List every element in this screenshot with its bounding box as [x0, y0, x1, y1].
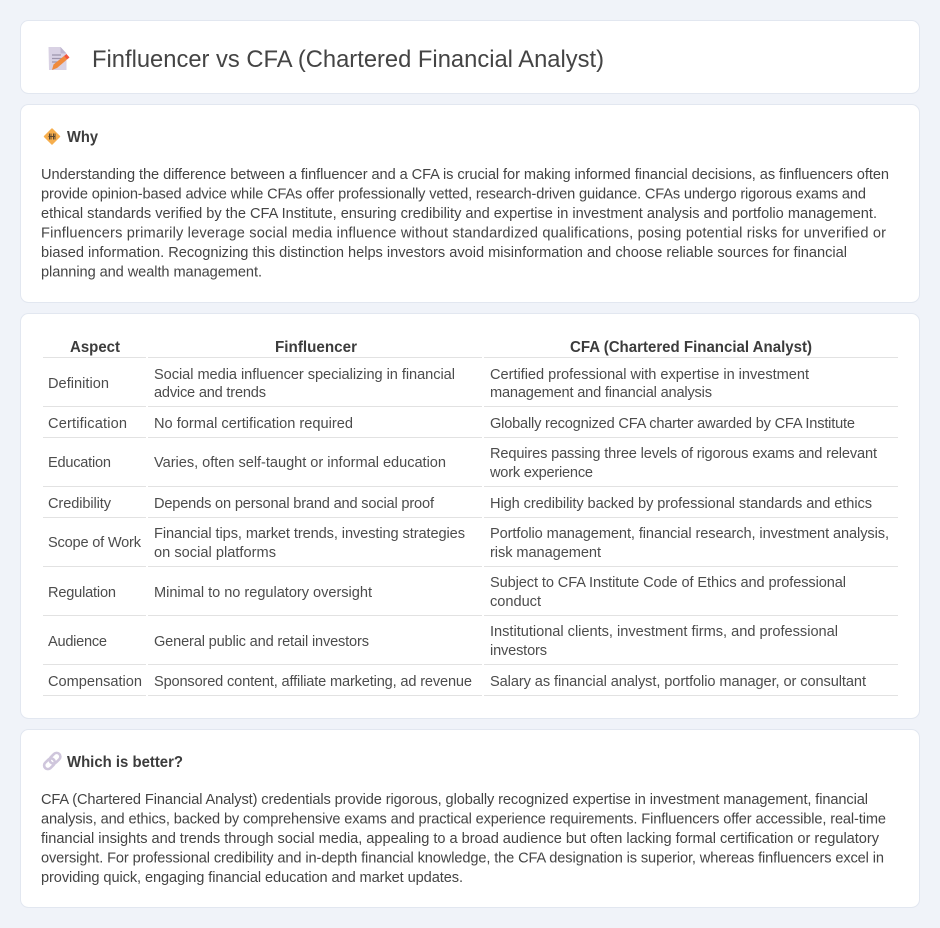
text block: why paragraph: Understanding the difference between a finfluencer and a CFA is crucial for making informed financial decisions, as finfluencers often — [41, 167, 889, 183]
icon: orange diamond sign — [44, 129, 60, 144]
row: certification — [43, 416, 898, 438]
row: compensation: Sponsored content, affiliate marketing, ad revenue — [154, 674, 472, 690]
row: audience: General public and retail investors — [154, 634, 369, 650]
row: regulation: conduct — [490, 594, 541, 610]
row: education: Requires passing three levels of rigorous exams and relevant — [490, 446, 877, 462]
row: regulation: Minimal to no regulatory oversight — [154, 585, 372, 601]
row: definition: management and financial analysis — [490, 385, 712, 401]
icon: link — [43, 751, 62, 771]
row: definition: advice and trends — [154, 385, 266, 401]
row: compensation: Salary as financial analyst, portfolio manager, or consultant — [490, 674, 866, 690]
panel: title card — [20, 20, 920, 94]
row: scope of work: risk management — [490, 545, 601, 561]
row: definition: Social media influencer specializing in financial — [154, 367, 455, 383]
heading: why: Why — [67, 129, 98, 146]
row: scope of work: on social platforms — [154, 545, 276, 561]
row: definition — [43, 367, 898, 406]
row: scope of work: Financial tips, market trends, investing strategies — [154, 526, 465, 542]
text block: why paragraph: ethical standards verified by the CFA Institute, ensuring credibility and expertise in investment analysis and portfolio management. — [41, 206, 877, 222]
row: audience — [43, 624, 898, 664]
row: credibility — [43, 496, 898, 518]
row: education: Education — [48, 455, 111, 471]
row: education: work experience — [489, 465, 593, 481]
table header — [43, 339, 898, 358]
row: certification: No formal certification required — [154, 416, 353, 432]
row: audience: investors — [490, 643, 547, 659]
text block: which is better paragraph: financial insights and trends through social media, appealing to a broad audience but often lacking formal certification or regulatory — [41, 831, 880, 847]
row: compensation: Compensation — [48, 674, 142, 690]
row: definition: Definition — [48, 376, 109, 392]
row: regulation: Subject to CFA Institute Code of Ethics and professional — [490, 575, 846, 591]
text block: which is better paragraph: analysis, and ethics, backed by comprehensive exams and practical experience requirements. Finfluencers offer accessible, real-time — [41, 812, 886, 828]
row: regulation: Regulation — [48, 585, 116, 601]
icon: memo with pencil — [48, 47, 70, 70]
text block: why paragraph: provide opinion-based advice while CFAs offer professionally vetted, research-driven guidance. CFAs undergo rigorous exams and — [41, 186, 866, 202]
row: audience: Audience — [48, 634, 107, 650]
table header: Aspect — [70, 339, 121, 356]
heading: which is better: Which is better? — [67, 754, 183, 771]
row: scope of work: Portfolio management, financial research, investment analysis, — [490, 526, 889, 542]
row: scope of work — [43, 526, 898, 566]
text block: why paragraph — [41, 167, 889, 280]
text block: why paragraph: Finfluencers primarily leverage social media influence without standardized qualifications, posing potential risks for unverified or — [41, 226, 886, 242]
row: credibility: High credibility backed by professional standards and ethics — [490, 496, 872, 512]
row: education — [43, 446, 898, 486]
text block: which is better paragraph: oversight. For professional credibility and in-depth financial knowledge, the CFA designation is superior, whereas finfluencers excel in — [41, 850, 884, 866]
row: credibility: Depends on personal brand and social proof — [154, 496, 435, 512]
row: regulation — [43, 575, 898, 616]
text block: which is better paragraph: providing quick, engaging financial education and market updates. — [41, 870, 463, 886]
table header: CFA (Chartered Financial Analyst) — [570, 339, 812, 356]
text block: why paragraph: biased information. Recognizing this distinction helps investors avoid misinformation and choose reliable sources for financial — [41, 245, 847, 261]
text block: why paragraph: planning and wealth management. — [41, 264, 262, 280]
text block: which is better paragraph — [41, 792, 886, 886]
title: Finfluencer vs CFA (Chartered Financial Analyst) — [92, 46, 604, 73]
table header: Finfluencer — [275, 339, 357, 356]
row: scope of work: Scope of Work — [48, 535, 142, 551]
row: compensation — [43, 674, 898, 696]
panel: comparison table — [20, 314, 920, 718]
text block: which is better paragraph: CFA (Chartered Financial Analyst) credentials provide rigorous, globally recognized expertise in investment management, financial — [41, 792, 868, 808]
row: certification: Globally recognized CFA charter awarded by CFA Institute — [490, 416, 855, 432]
row: education: Varies, often self-taught or informal education — [154, 455, 446, 471]
row: certification: Certification — [48, 416, 127, 432]
panel: which is better — [20, 730, 920, 908]
panel: why — [20, 104, 920, 302]
row: definition: Certified professional with expertise in investment — [490, 367, 809, 383]
row: audience: Institutional clients, investment firms, and professional — [490, 624, 838, 640]
row: credibility: Credibility — [48, 496, 112, 512]
